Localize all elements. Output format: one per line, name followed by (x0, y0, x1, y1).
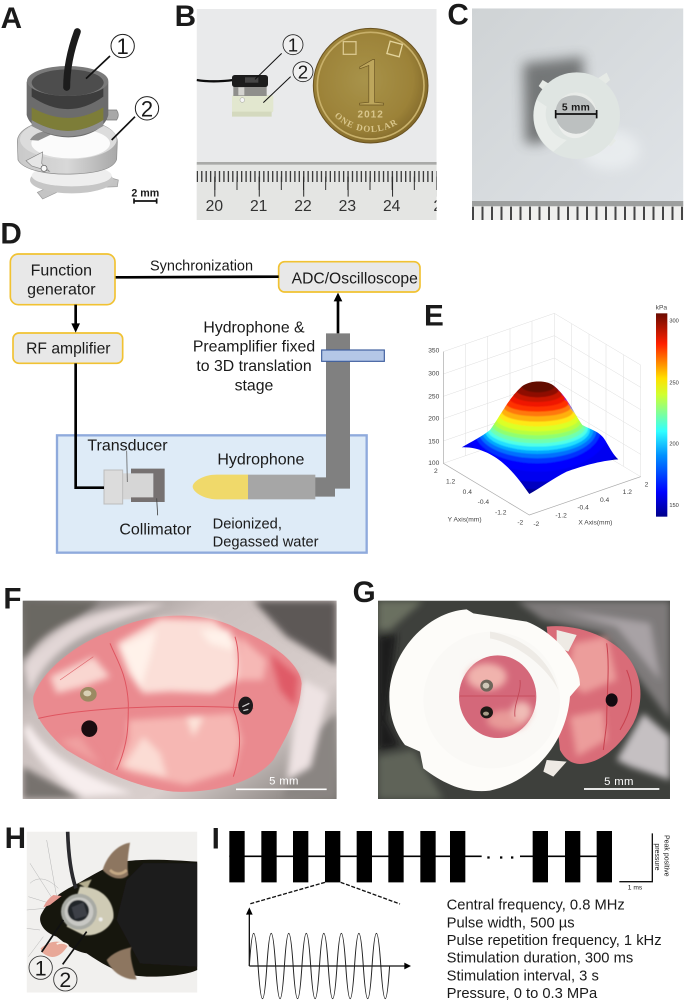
scale bar: 5 mm (269, 775, 299, 787)
y axis ticks and label: 1.2 (446, 479, 456, 486)
photo H (27, 832, 197, 993)
panel letter B: B (175, 0, 196, 33)
y axis ticks and label (434, 468, 524, 527)
ruler ticks and numbers: 24 (383, 198, 401, 215)
synchronization line: Synchronization (150, 258, 253, 274)
stimulation parameters: Stimulation interval, 3 s (447, 968, 599, 984)
callouts 1 and 2 (29, 920, 87, 992)
hydrophone: Hydrophone (217, 451, 305, 468)
transducer with collimator (87, 438, 192, 538)
z axis ticks: 200 (428, 416, 440, 423)
5 mm bar (556, 103, 597, 118)
scale axes (619, 833, 669, 892)
pulse train (229, 831, 612, 882)
scale axes: pressure (653, 843, 660, 871)
hydrophone (193, 451, 315, 499)
panel letter F: F (3, 582, 21, 615)
3D axes grid (443, 313, 641, 515)
z axis ticks (428, 347, 440, 467)
water label: Degassed water (213, 535, 319, 551)
one dollar coin: ONE DOLLAR (336, 113, 398, 132)
panel D: experimental setup diagram (0, 218, 420, 553)
stimulation parameters: Pulse width, 500 µs (447, 915, 575, 931)
stimulation parameters: Pulse repetition frequency, 1 kHz (447, 933, 662, 949)
scale bar: 5 mm (604, 776, 634, 788)
panel F: exposed skull photo (3, 582, 337, 799)
white holder ring (389, 609, 580, 791)
x axis ticks and label: -2 (533, 521, 540, 528)
y axis ticks and label: 0.4 (463, 489, 472, 496)
y axis ticks and label: Y Axis(mm) (448, 516, 482, 523)
callouts 1 and 2: 2 (59, 968, 71, 992)
ruler ticks and numbers (192, 173, 442, 215)
x axis ticks and label: 0.4 (600, 497, 610, 504)
skull surface (33, 616, 302, 792)
wire: amplifier to transducer (76, 363, 104, 488)
one dollar coin (312, 28, 428, 144)
z axis ticks: 300 (428, 371, 440, 378)
y axis ticks and label: -0.4 (478, 499, 489, 506)
scale axes: Peak positive (662, 835, 669, 877)
x axis ticks and label (533, 481, 649, 528)
stimulation parameters: Stimulation duration, 300 ms (447, 951, 633, 967)
cable (68, 832, 76, 888)
water tank (57, 435, 367, 553)
function generator box: Function (31, 262, 92, 279)
one dollar coin: 2012 (358, 109, 384, 120)
ruler ticks and numbers: 2 (433, 198, 442, 215)
x axis ticks and label: 1.2 (623, 489, 632, 496)
hydrophone mount arm (315, 333, 350, 497)
bone screws (80, 687, 253, 737)
y axis ticks and label: -2 (517, 520, 524, 527)
pale bone patches (50, 618, 298, 785)
callout 1: 1 (117, 34, 129, 59)
panel H: mouse with device photo (5, 822, 197, 993)
y axis ticks and label: -1.2 (495, 509, 507, 516)
ruler ticks and numbers: 20 (206, 198, 223, 215)
callout 2 (112, 96, 159, 140)
colour bar: kPa (656, 305, 667, 312)
z axis ticks: 350 (428, 347, 440, 354)
colour bar: 200 (669, 441, 679, 447)
transducer with collimator: Transducer (87, 438, 168, 455)
scale bar 2 mm: 2 mm (131, 188, 159, 200)
holder ring with tabs (533, 72, 620, 159)
panel A: device 3D model (1, 2, 159, 204)
transducer with collimator: Collimator (119, 521, 192, 538)
callouts 1 and 2 (255, 35, 313, 103)
colour bar (656, 305, 679, 517)
panel B: device photo with coin and ruler (175, 0, 437, 220)
ruler ticks and numbers: 22 (294, 198, 312, 215)
function generator box (10, 254, 115, 305)
callouts 1 and 2: 2 (298, 62, 308, 83)
ruler ticks and numbers: 21 (250, 198, 267, 215)
photo C (472, 8, 683, 220)
x axis ticks and label: -1.2 (555, 513, 567, 520)
scale axes: 1 ms (628, 885, 643, 892)
fur shading (23, 601, 337, 799)
x axis ticks and label: X Axis(mm) (578, 520, 612, 527)
ruler (472, 201, 683, 220)
water label: Deionized, (213, 517, 282, 533)
photo F (23, 601, 337, 799)
one dollar coin: 1 (354, 44, 388, 120)
fur shading (378, 601, 670, 799)
whiskers (27, 840, 58, 957)
panel letter E: E (424, 299, 444, 332)
y axis ticks and label: 2 (434, 468, 438, 475)
stage label: Preamplifier fixed (193, 339, 315, 356)
mouse body (40, 860, 197, 977)
sine wave plot (246, 907, 411, 999)
translation stage bar (322, 350, 384, 361)
callouts 1 and 2: 1 (35, 956, 47, 980)
photo G (378, 601, 670, 799)
callout 2: 2 (141, 96, 153, 121)
panel C: holder photo (447, 0, 683, 220)
arrow: generator to amplifier (71, 305, 80, 333)
scale bar (584, 776, 659, 789)
baseplate with tabs (30, 165, 118, 199)
device rendering (17, 32, 118, 199)
colour bar: 150 (669, 503, 679, 509)
cable (67, 32, 77, 87)
ruler ticks and numbers: 23 (339, 198, 356, 215)
sutures (38, 637, 253, 777)
panel I: stimulation waveform (212, 823, 669, 1001)
stage label: stage (235, 377, 274, 394)
stimulation parameters: Central frequency, 0.8 MHz (447, 898, 625, 914)
zoom dashed lines (249, 882, 400, 904)
connector stub (107, 110, 118, 120)
RF amplifier box: RF amplifier (26, 341, 111, 358)
exposed skull (547, 626, 640, 764)
z axis ticks: 250 (428, 393, 440, 400)
dome surface (462, 381, 618, 494)
implanted device (61, 879, 114, 935)
ADC oscilloscope box: ADC/Oscilloscope (292, 270, 418, 287)
colour bar: 300 (669, 319, 679, 325)
arrow: hydrophone to oscilloscope (334, 293, 342, 333)
miniature device (197, 75, 273, 117)
5 mm bar: 5 mm (562, 103, 590, 114)
ring holder (17, 118, 117, 174)
ears (103, 843, 137, 979)
transducer cylinder (27, 66, 108, 137)
panel letter H: H (5, 822, 26, 855)
ADC oscilloscope box (279, 262, 420, 292)
z axis ticks: 150 (428, 438, 440, 445)
x axis ticks and label: 2 (645, 481, 649, 488)
panel letter D: D (0, 218, 22, 251)
panel G: skull with holder photo (353, 576, 670, 799)
callout 1 (86, 34, 134, 79)
stage label: Hydrophone & (203, 319, 305, 336)
panel letter A: A (1, 2, 22, 35)
colour bar: 250 (669, 381, 679, 387)
photo B (196, 9, 437, 220)
window in holder (459, 655, 536, 738)
z axis ticks: 100 (428, 460, 440, 467)
screws in window (480, 680, 618, 718)
RF amplifier box (13, 333, 123, 363)
function generator box: generator (27, 282, 96, 299)
panel letter I: I (212, 823, 220, 856)
stage label: to 3D translation (196, 358, 312, 375)
cast shadow (523, 57, 583, 143)
x axis ticks and label: -0.4 (577, 505, 589, 512)
callouts 1 and 2: 1 (288, 35, 298, 56)
scale bar (236, 775, 327, 789)
panel E: 3D pressure field chart (424, 299, 679, 528)
panel letter G: G (353, 576, 376, 609)
